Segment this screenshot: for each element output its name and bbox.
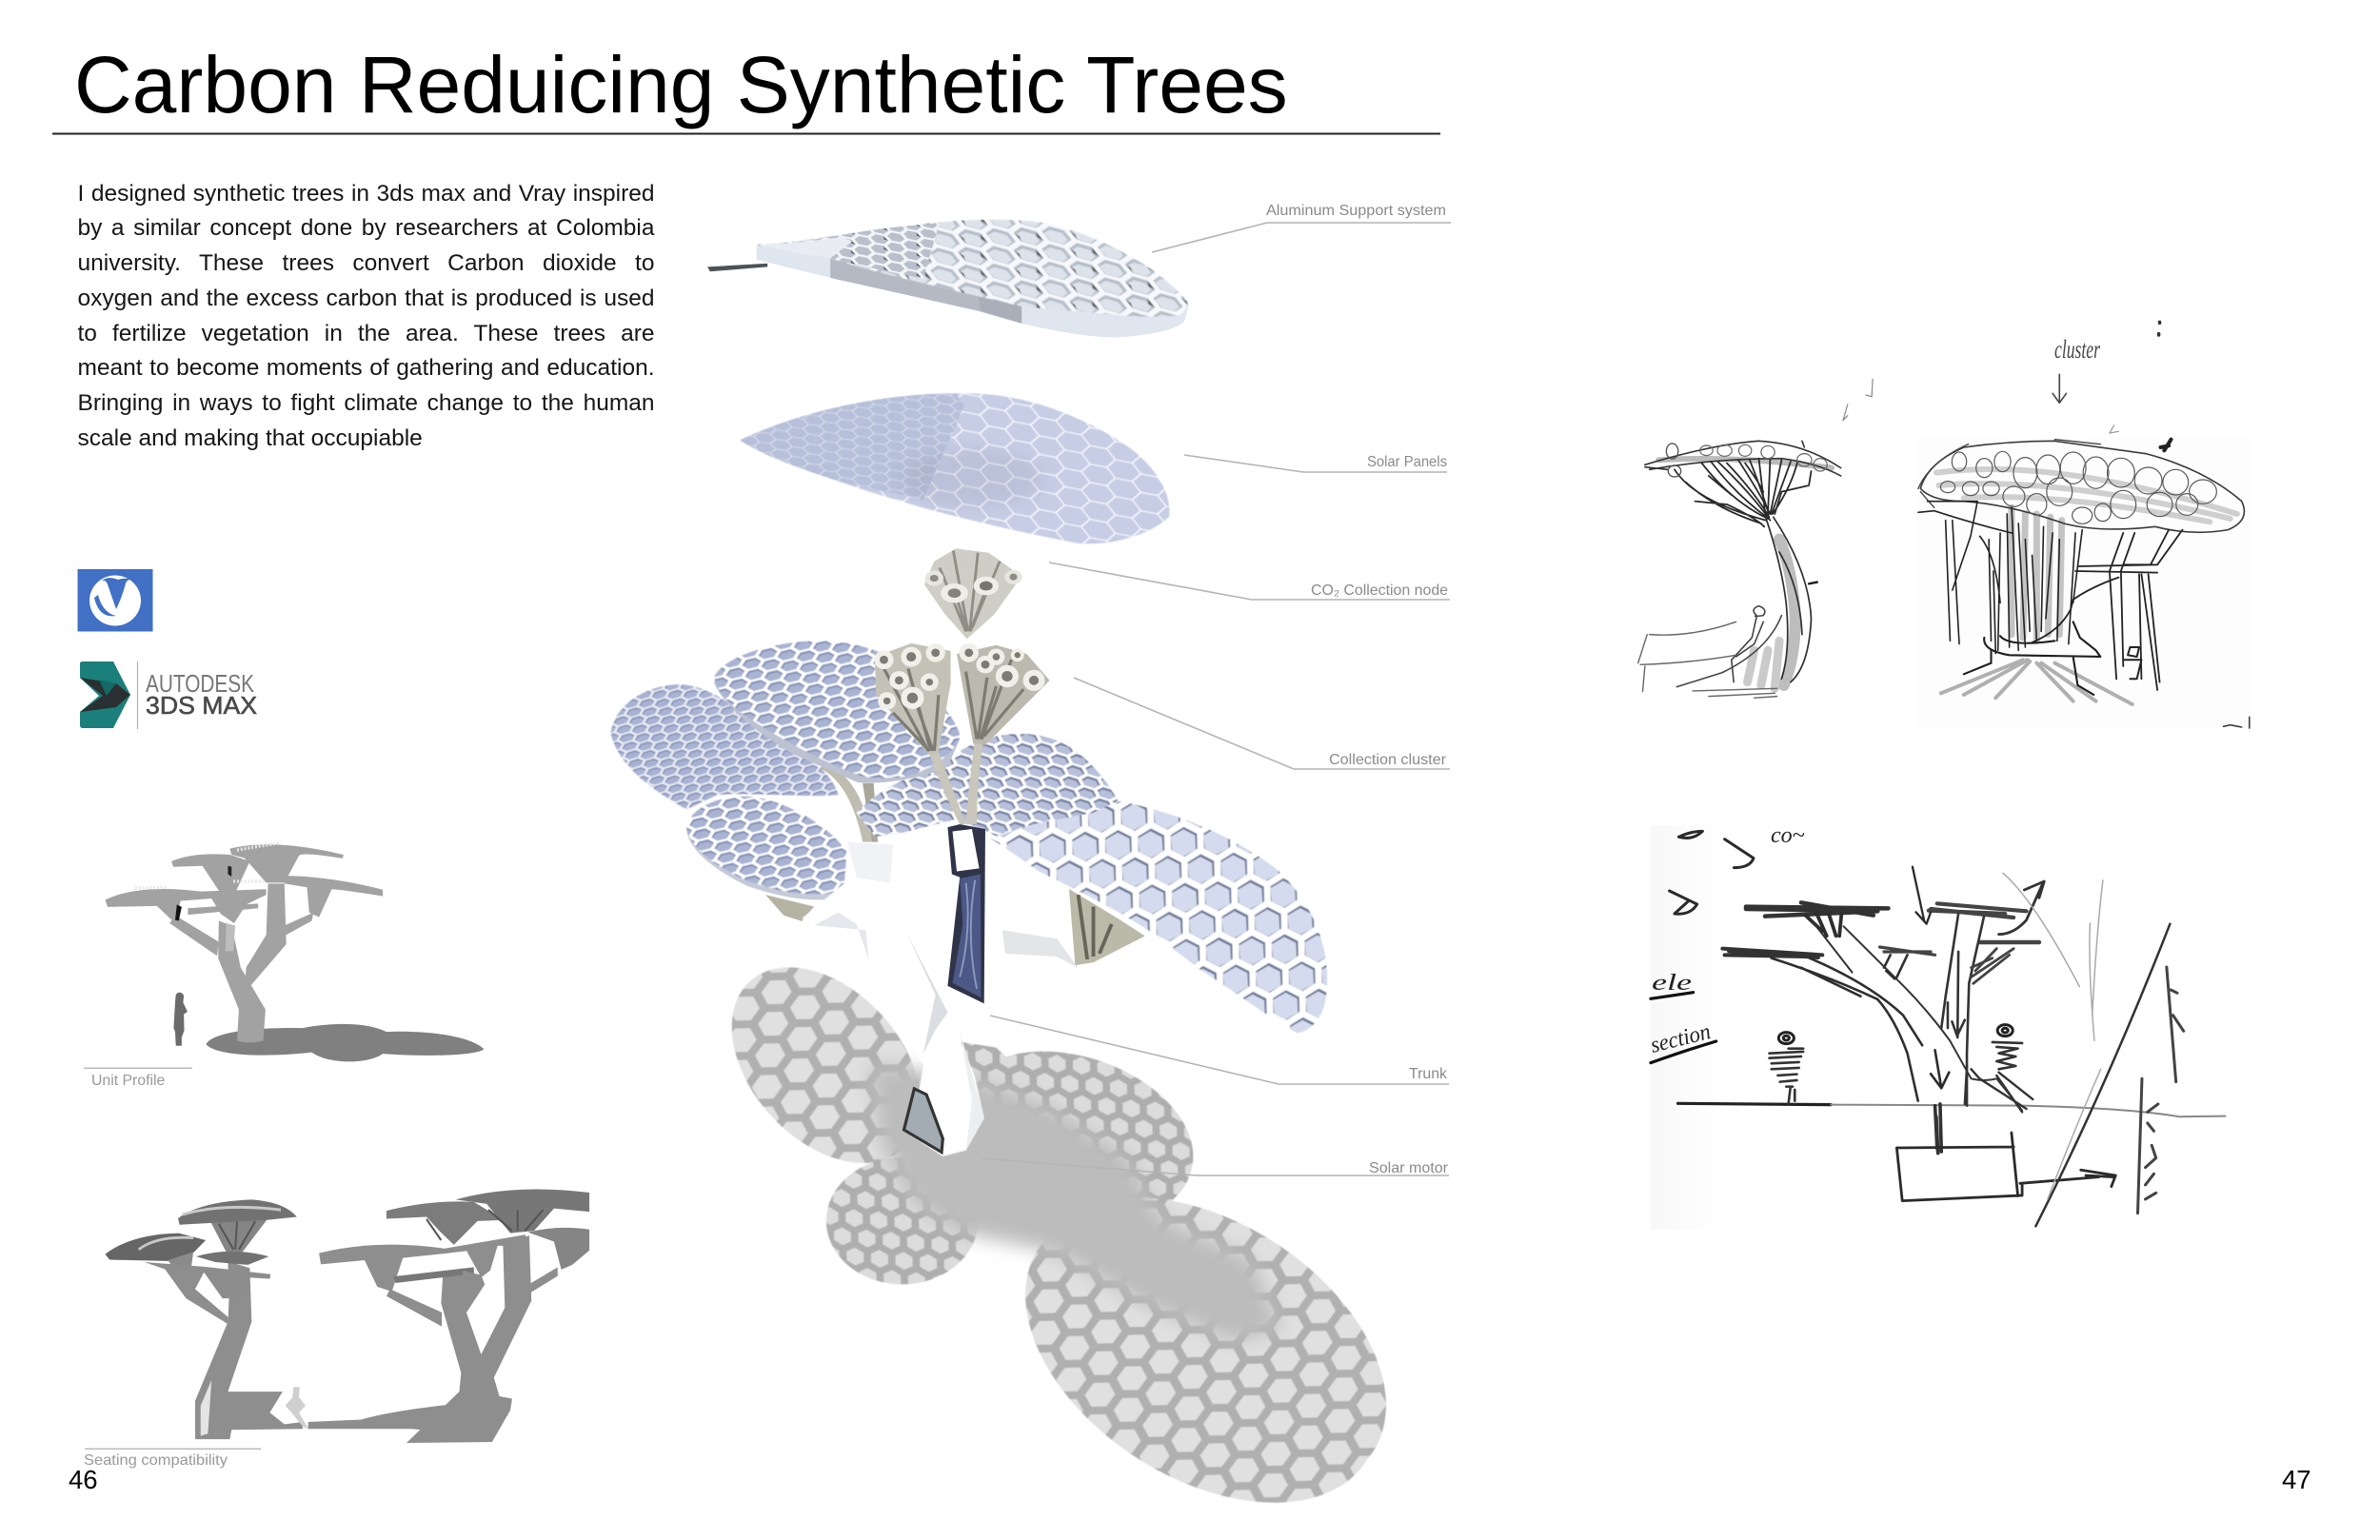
caption: unit profile: [84, 1068, 192, 1089]
text block: project description: oxygen and the excess carbon that is produced is used: [78, 286, 655, 311]
leader line: collection cluster: [1074, 678, 1450, 769]
handwritten note: section: section: [1648, 1019, 1714, 1058]
label: trunk: Trunk: [1409, 1066, 1448, 1082]
underside cones and brackets: [765, 762, 1145, 968]
unit profile drawing: [105, 842, 484, 1061]
label: solar panels: Solar Panels: [1367, 454, 1447, 470]
exploded: aluminum support panel: [707, 220, 1189, 337]
text block: project description: university. These trees convert Carbon dioxide to: [78, 250, 655, 276]
right seating tree: [308, 1189, 589, 1443]
label: solar motor: Solar motor: [1369, 1160, 1449, 1176]
icon: Autodesk 3DS Max logo: 3DS MAX: [146, 691, 257, 720]
trunk base window: [904, 1089, 942, 1153]
collection cluster: [874, 643, 1050, 824]
exploded: solar panels: [740, 393, 1169, 543]
text block: project description: scale and making that occupiable: [78, 425, 423, 451]
sketch drawing: tree section: [1651, 831, 2225, 1226]
label: CO2 node: CO₂ Collection node: [1311, 582, 1448, 599]
top canopy panel: [714, 641, 960, 783]
leader line: CO2 node: [1049, 563, 1450, 600]
unit tree: [105, 842, 383, 1042]
leader line: trunk: [990, 1016, 1449, 1084]
page number 47: 47: [2282, 1465, 2311, 1494]
sketch: tree section with underground tank: [1651, 825, 2241, 1230]
right canopy panel: [857, 734, 1327, 1033]
handwritten note: cluster: cluster: [2054, 335, 2100, 364]
sketch drawing: canopy section: [1918, 322, 2250, 728]
caption: seating compatibility: Seating compatibility: [84, 1452, 228, 1469]
text block: project description: meant to become moments of gathering and education.: [78, 355, 655, 381]
assembled tree and cast shadow: [610, 641, 1386, 1503]
text block: project description: I designed synthetic trees in 3ds max and Vray inspired: [78, 181, 655, 206]
highlight on left trunk: [201, 1380, 211, 1436]
caption: unit profile: Unit Profile: [91, 1073, 165, 1089]
white trunk: [802, 833, 1023, 1156]
text block: project description: by a similar concept done by researchers at Colombia: [78, 215, 655, 241]
icon: Autodesk 3DS Max logo: AUTODESK: [146, 669, 255, 698]
ground shadow: [732, 967, 1386, 1503]
leader line: solar motor: [982, 1158, 1449, 1176]
leader line: solar panels: [1184, 454, 1447, 472]
exploded: CO2 collection node: [924, 548, 1022, 639]
text block: project description: to fertilize vegetation in the area. These trees are: [78, 321, 655, 346]
handwritten note: co2: co~: [1771, 823, 1805, 848]
sketch: canopy section with cluster arrow: [1917, 438, 2251, 728]
seated people: [286, 1387, 308, 1429]
label: collection cluster: Collection cluster: [1329, 752, 1447, 768]
left seating tree: [105, 1199, 303, 1439]
text block: project description: Bringing in ways to fight climate change to the human: [78, 390, 655, 416]
unit shadow: [206, 1024, 484, 1061]
left canopy panel: [610, 684, 839, 810]
leader line: aluminum support system: [1152, 203, 1451, 252]
seating compatibility drawing: [105, 1189, 589, 1443]
trunk glass panel: [947, 824, 985, 1003]
far part of right panel: [857, 734, 1118, 836]
lower-left canopy panel: [686, 797, 850, 899]
text block: project description: [78, 181, 655, 451]
icon: Autodesk 3DS Max logo: [80, 661, 257, 729]
icon: V-Ray logo: [78, 569, 152, 632]
title: Carbon Reduicing Synthetic Trees: [74, 40, 1288, 129]
sketch: single canopy with seating: [1638, 379, 1873, 698]
handwritten note: elevation: ele: [1652, 971, 1693, 996]
scale person: [173, 993, 188, 1046]
page number 46: 46: [69, 1465, 98, 1494]
solid core of the shadow: [869, 1065, 1281, 1341]
title underline: [52, 133, 1440, 135]
label: aluminum support system: Aluminum Support system: [1266, 203, 1446, 219]
